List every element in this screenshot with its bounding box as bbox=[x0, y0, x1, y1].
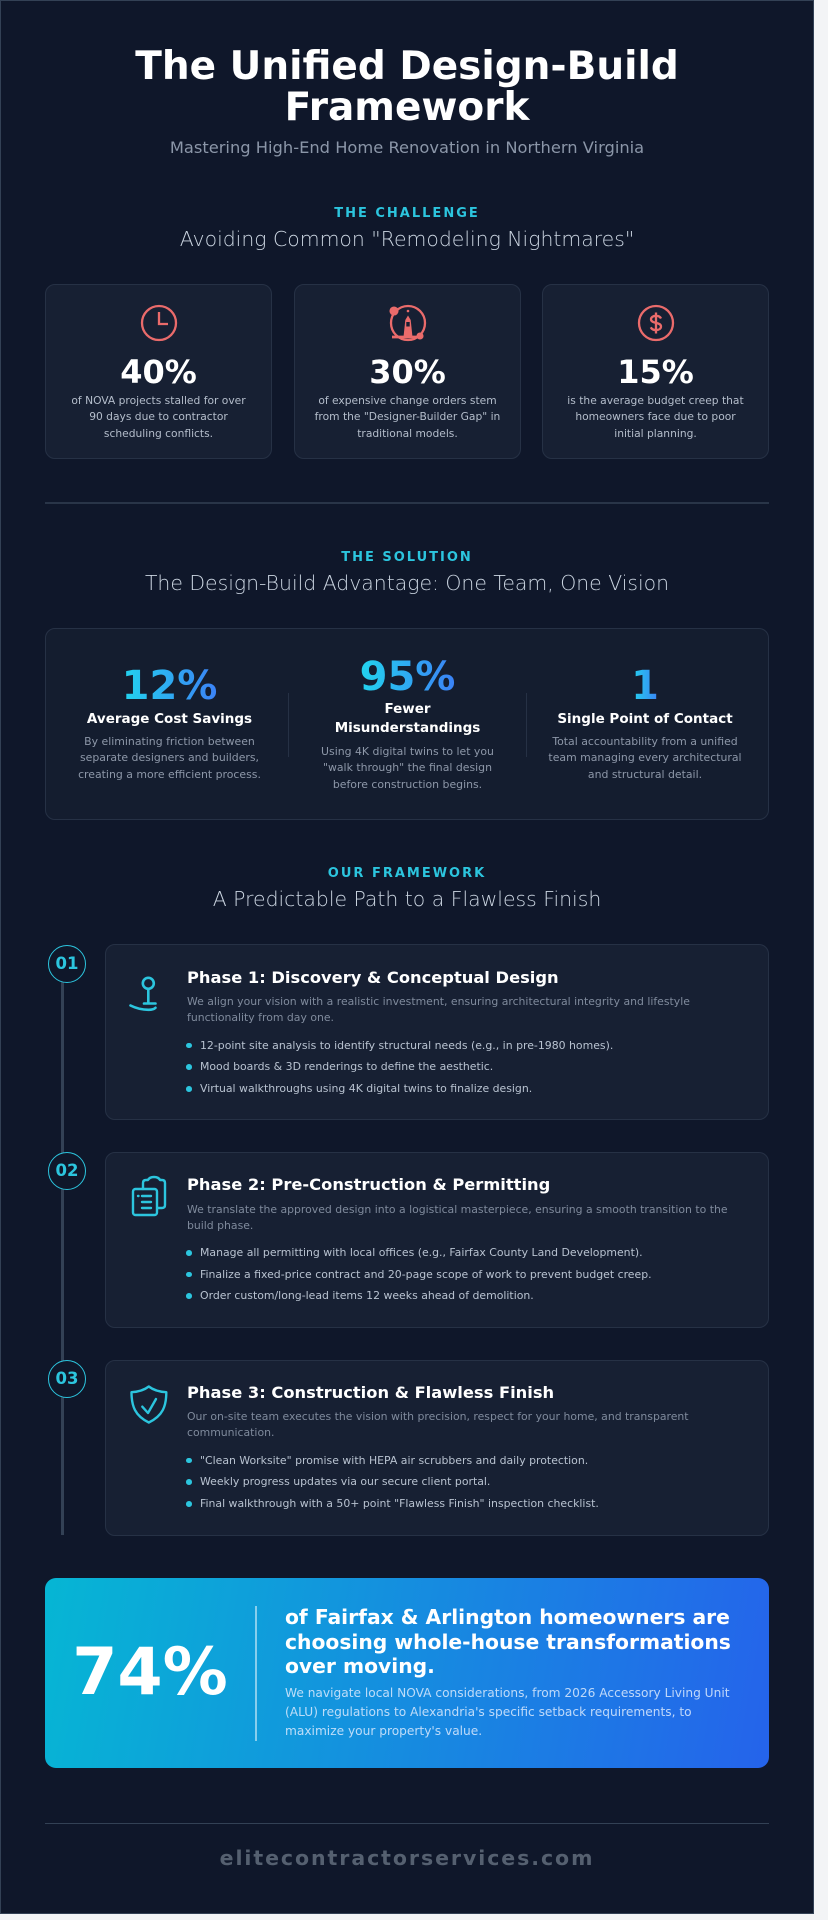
phase title: Phase 1: Discovery & Conceptual Design bbox=[187, 968, 559, 987]
bullet text: Finalize a fixed-price contract and 20-page scope of work to prevent budget creep. bbox=[200, 1268, 652, 1281]
bullet dot bbox=[186, 1458, 192, 1463]
title bbox=[135, 44, 679, 130]
panel: phase 1 bbox=[105, 944, 769, 1120]
stat description: team managing every architectural bbox=[548, 751, 742, 764]
stat column: 12% bbox=[78, 663, 261, 781]
phase description bbox=[187, 995, 690, 1024]
bullet dot bbox=[186, 1043, 192, 1048]
timeline marker 03: 03 bbox=[56, 1369, 78, 1388]
phase card background bbox=[105, 1360, 769, 1536]
stat description bbox=[548, 735, 742, 781]
callout heading: of Fairfax & Arlington homeowners are bbox=[285, 1605, 730, 1629]
title: The Unified Design-Build bbox=[135, 44, 679, 89]
section label: our framework: OUR FRAMEWORK bbox=[328, 866, 486, 881]
panel: phase 2 bbox=[105, 1152, 769, 1328]
phase description: Our on-site team executes the vision with precision, respect for your home, and transparent bbox=[187, 1410, 689, 1423]
stat description bbox=[78, 735, 261, 781]
callout description: maximize your property's value. bbox=[285, 1724, 482, 1738]
section heading: challenge: Avoiding Common "Remodeling Nightmares" bbox=[180, 227, 634, 251]
stat description: traditional models. bbox=[357, 427, 458, 440]
icon: shield check bbox=[130, 1385, 168, 1424]
stat description bbox=[71, 394, 246, 440]
stat value 1: 1 bbox=[631, 663, 659, 709]
stat description: scheduling conflicts. bbox=[104, 427, 213, 440]
subtitle: Mastering High-End Home Renovation in Northern Virginia bbox=[170, 138, 644, 157]
stat label bbox=[335, 701, 480, 736]
phase card background bbox=[105, 1152, 769, 1328]
callout heading bbox=[285, 1605, 731, 1678]
callout description bbox=[285, 1686, 730, 1738]
title: Framework bbox=[285, 85, 529, 130]
stat label: Average Cost Savings bbox=[87, 711, 252, 727]
stat description: initial planning. bbox=[614, 427, 697, 440]
stat description bbox=[321, 745, 494, 791]
timeline marker 03 bbox=[48, 1360, 86, 1398]
phase description bbox=[187, 1410, 689, 1439]
bullet text: Mood boards & 3D renderings to define the aesthetic. bbox=[200, 1060, 493, 1073]
stat description: of expensive change orders stem bbox=[318, 394, 497, 407]
callout description: We navigate local NOVA considerations, from 2026 Accessory Living Unit bbox=[285, 1686, 730, 1700]
stat column: 95% bbox=[321, 654, 494, 791]
stat label: Single Point of Contact bbox=[557, 711, 733, 727]
panel: phase 3 bbox=[105, 1360, 769, 1536]
phase description: We align your vision with a realistic investment, ensuring architectural integrity and lifestyle bbox=[187, 995, 690, 1008]
phase title: Phase 2: Pre-Construction & Permitting bbox=[187, 1175, 550, 1194]
phase title: Phase 3: Construction & Flawless Finish bbox=[187, 1383, 554, 1402]
phase description: We translate the approved design into a logistical masterpiece, ensuring a smooth transition to the bbox=[187, 1203, 728, 1216]
bullet dot bbox=[186, 1272, 192, 1277]
stat description: creating a more efficient process. bbox=[78, 768, 261, 781]
panel: stat card 40% bbox=[45, 284, 272, 459]
phase description: build phase. bbox=[187, 1219, 253, 1232]
section label: the challenge: THE CHALLENGE bbox=[334, 206, 480, 220]
icon: clock bbox=[140, 304, 178, 342]
timeline line bbox=[61, 961, 64, 1535]
stat value: 15% bbox=[617, 353, 694, 391]
stat description: of NOVA projects stalled for over bbox=[71, 394, 246, 407]
bullet dot bbox=[186, 1064, 192, 1070]
phase description: functionality from day one. bbox=[187, 1011, 334, 1024]
stat value: 40% bbox=[120, 353, 197, 391]
bullet dot bbox=[186, 1293, 192, 1299]
icon: pin on hand bbox=[129, 976, 157, 1012]
icon: clipboards bbox=[132, 1176, 166, 1216]
stat column: 1 bbox=[548, 663, 742, 781]
bullet text: Final walkthrough with a 50+ point "Flawless Finish" inspection checklist. bbox=[200, 1497, 599, 1510]
bullet dot bbox=[186, 1250, 192, 1256]
phase card background bbox=[105, 944, 769, 1120]
stat description: By eliminating friction between bbox=[84, 735, 255, 748]
phase description bbox=[187, 1203, 728, 1232]
callout stat: 74% bbox=[72, 1635, 228, 1710]
panel: solution stats bbox=[45, 628, 769, 820]
icon: dollar coin bbox=[638, 304, 674, 342]
stat description: and structural detail. bbox=[588, 768, 702, 781]
timeline marker 01: 01 bbox=[56, 954, 78, 972]
callout: 74% bbox=[45, 1578, 769, 1768]
stat description: from the "Designer-Builder Gap" in bbox=[315, 410, 500, 423]
bullet text: "Clean Worksite" promise with HEPA air scrubbers and daily protection. bbox=[200, 1454, 588, 1467]
bullet text: 12-point site analysis to identify structural needs (e.g., in pre-1980 homes). bbox=[200, 1039, 613, 1052]
timeline marker 02: 02 bbox=[56, 1161, 78, 1180]
stat description: Total accountability from a unified bbox=[552, 735, 738, 748]
phase description: communication. bbox=[187, 1426, 274, 1439]
bullet text: Order custom/long-lead items 12 weeks ahead of demolition. bbox=[200, 1289, 534, 1302]
icon: lighthouse ring bbox=[390, 304, 426, 342]
section heading: solution: The Design-Build Advantage: One Team, One Vision bbox=[145, 571, 669, 595]
stat label: Fewer bbox=[384, 701, 431, 717]
callout heading: over moving. bbox=[285, 1654, 435, 1678]
bullet dot bbox=[186, 1501, 192, 1507]
footer website: elitecontractorservices.com bbox=[220, 1846, 594, 1870]
stat description: 90 days due to contractor bbox=[89, 410, 228, 423]
stat value 12%: 12% bbox=[122, 663, 217, 709]
stat label: Misunderstandings bbox=[335, 720, 480, 736]
stat description bbox=[567, 394, 744, 440]
bullet text: Manage all permitting with local offices (e.g., Fairfax County Land Development). bbox=[200, 1246, 643, 1259]
stat value: 30% bbox=[369, 353, 446, 391]
section label: the solution: THE SOLUTION bbox=[341, 550, 473, 565]
callout heading: choosing whole-house transformations bbox=[285, 1630, 731, 1654]
section heading: framework: A Predictable Path to a Flawless Finish bbox=[213, 887, 601, 911]
panel: stat card 30% bbox=[294, 284, 521, 459]
callout description: (ALU) regulations to Alexandria's specific setback requirements, to bbox=[285, 1705, 692, 1719]
stat description: separate designers and builders, bbox=[80, 751, 259, 764]
bullet dot bbox=[186, 1086, 192, 1092]
timeline marker 01 bbox=[48, 944, 86, 982]
panel: stat card 15% bbox=[542, 284, 769, 459]
stat description: homeowners face due to poor bbox=[575, 410, 736, 423]
bullet text: Virtual walkthroughs using 4K digital twins to finalize design. bbox=[200, 1082, 532, 1095]
stat description: before construction begins. bbox=[333, 778, 482, 791]
stat description: "walk through" the final design bbox=[323, 761, 492, 774]
stat description: Using 4K digital twins to let you bbox=[321, 745, 494, 758]
bullet text: Weekly progress updates via our secure client portal. bbox=[200, 1475, 490, 1488]
timeline marker 02 bbox=[48, 1152, 86, 1190]
stat description bbox=[314, 394, 500, 440]
stat value 95%: 95% bbox=[360, 654, 455, 700]
stat description: is the average budget creep that bbox=[567, 394, 744, 407]
bullet dot bbox=[186, 1479, 192, 1485]
